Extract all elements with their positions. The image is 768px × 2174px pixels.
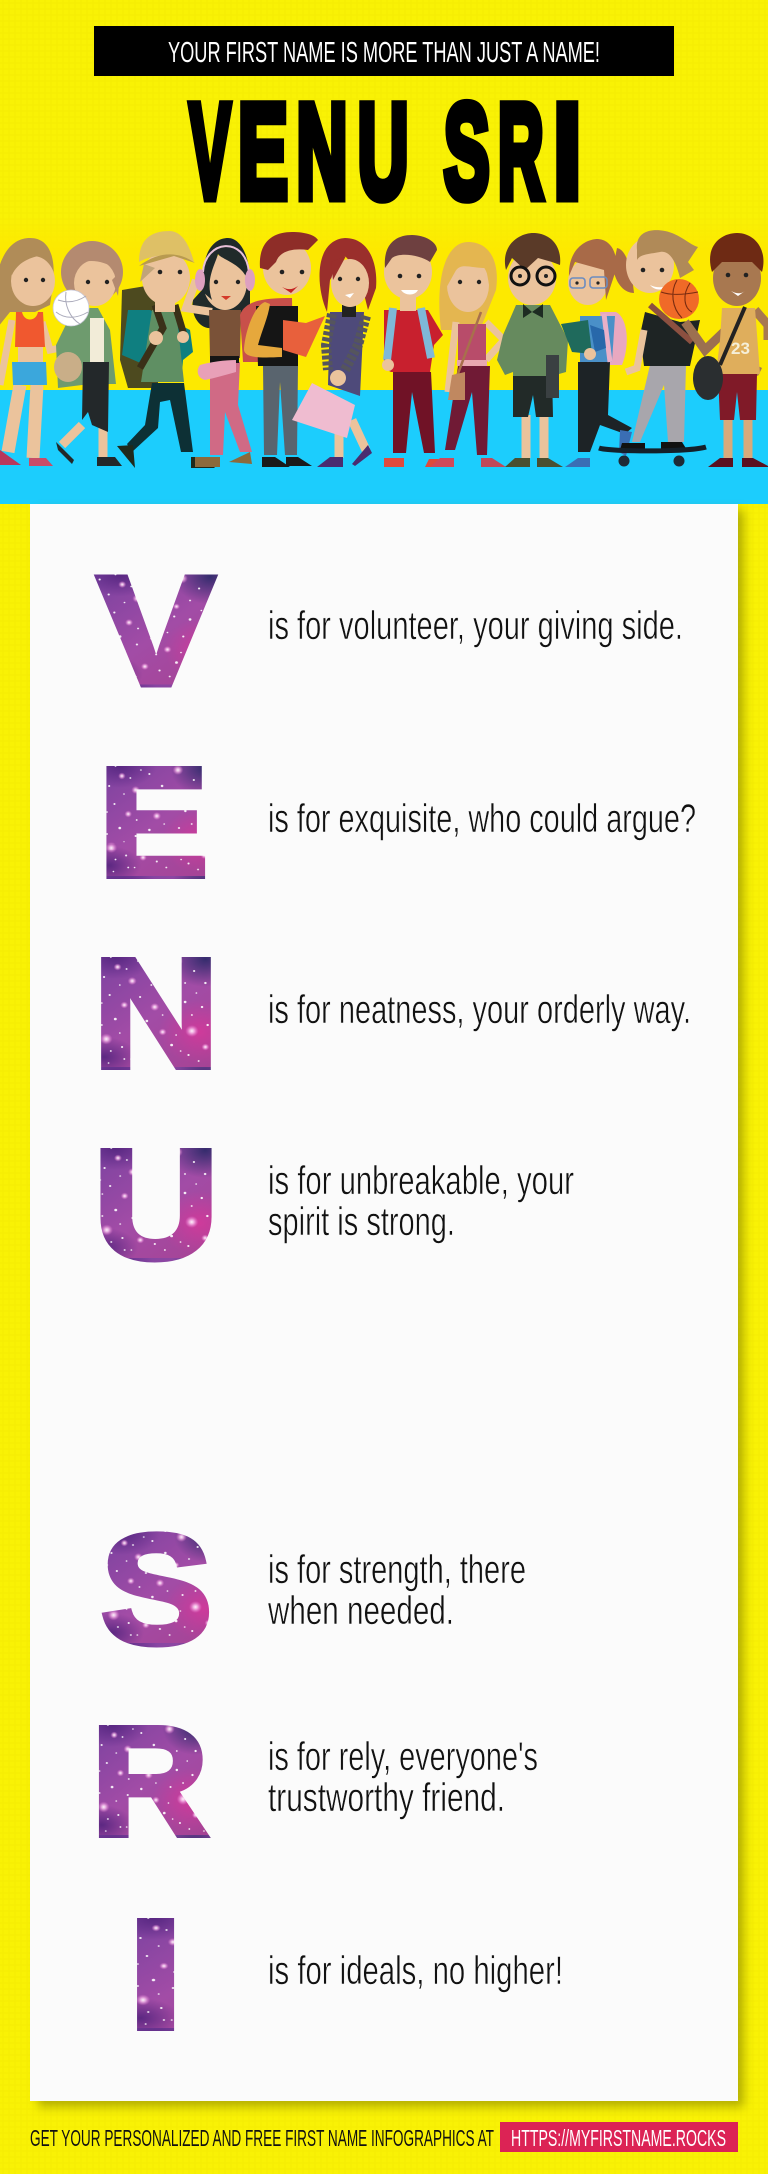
person 9: boy with glasses <box>497 233 568 467</box>
title: name: V <box>190 78 230 226</box>
text S: when needed. <box>267 1589 454 1633</box>
title: name: U <box>358 78 408 226</box>
illustration: group of twelve young people <box>0 230 768 468</box>
title: name: I <box>553 78 581 226</box>
person 12: boy in yellow tank top: 23 <box>731 339 750 358</box>
letter V: V <box>97 545 215 718</box>
title: name: N <box>296 78 348 226</box>
title: name: R <box>498 78 544 226</box>
text S: is for strength, there <box>268 1548 526 1592</box>
person 3: boy with cap and backpack <box>117 231 215 468</box>
row R <box>91 1694 538 1868</box>
heading banner <box>94 26 674 76</box>
person 5: boy with book <box>240 232 325 467</box>
row U <box>93 1117 574 1291</box>
row E <box>99 735 696 909</box>
person 1: girl in orange top <box>0 238 75 466</box>
person 6: girl with pink bag <box>292 238 376 467</box>
title: name: E <box>238 78 288 226</box>
row S <box>101 1503 526 1677</box>
text U: spirit is strong. <box>268 1200 455 1244</box>
letter N: N <box>93 927 219 1101</box>
person 8: blonde girl <box>430 242 506 467</box>
text I: is for ideals, no higher! <box>268 1949 563 1993</box>
text R: trustworthy friend. <box>268 1776 505 1820</box>
letter U: U <box>93 1117 219 1291</box>
text R: is for rely, everyone's <box>268 1735 538 1779</box>
title: name <box>190 78 581 226</box>
row I <box>127 1888 563 2062</box>
person 4: girl with headphones <box>186 238 255 467</box>
text U: is for unbreakable, your <box>268 1159 574 1203</box>
white panel <box>30 504 744 2107</box>
person 7: boy in red shirt <box>382 235 454 467</box>
title: name: S <box>444 78 490 226</box>
letter R: R <box>91 1694 208 1868</box>
row V <box>97 545 683 718</box>
person 10: girl with ponytail and pink backpack <box>561 239 634 467</box>
letter E: E <box>99 735 208 909</box>
person 12: boy in yellow tank top <box>693 233 768 467</box>
blue floor band <box>0 390 768 504</box>
row N <box>93 927 691 1101</box>
person 11: skateboarder with basketball <box>599 230 728 466</box>
letter I: I <box>127 1888 184 2062</box>
letter S: S <box>101 1503 212 1677</box>
person 2: girl with volleyball <box>53 241 123 466</box>
